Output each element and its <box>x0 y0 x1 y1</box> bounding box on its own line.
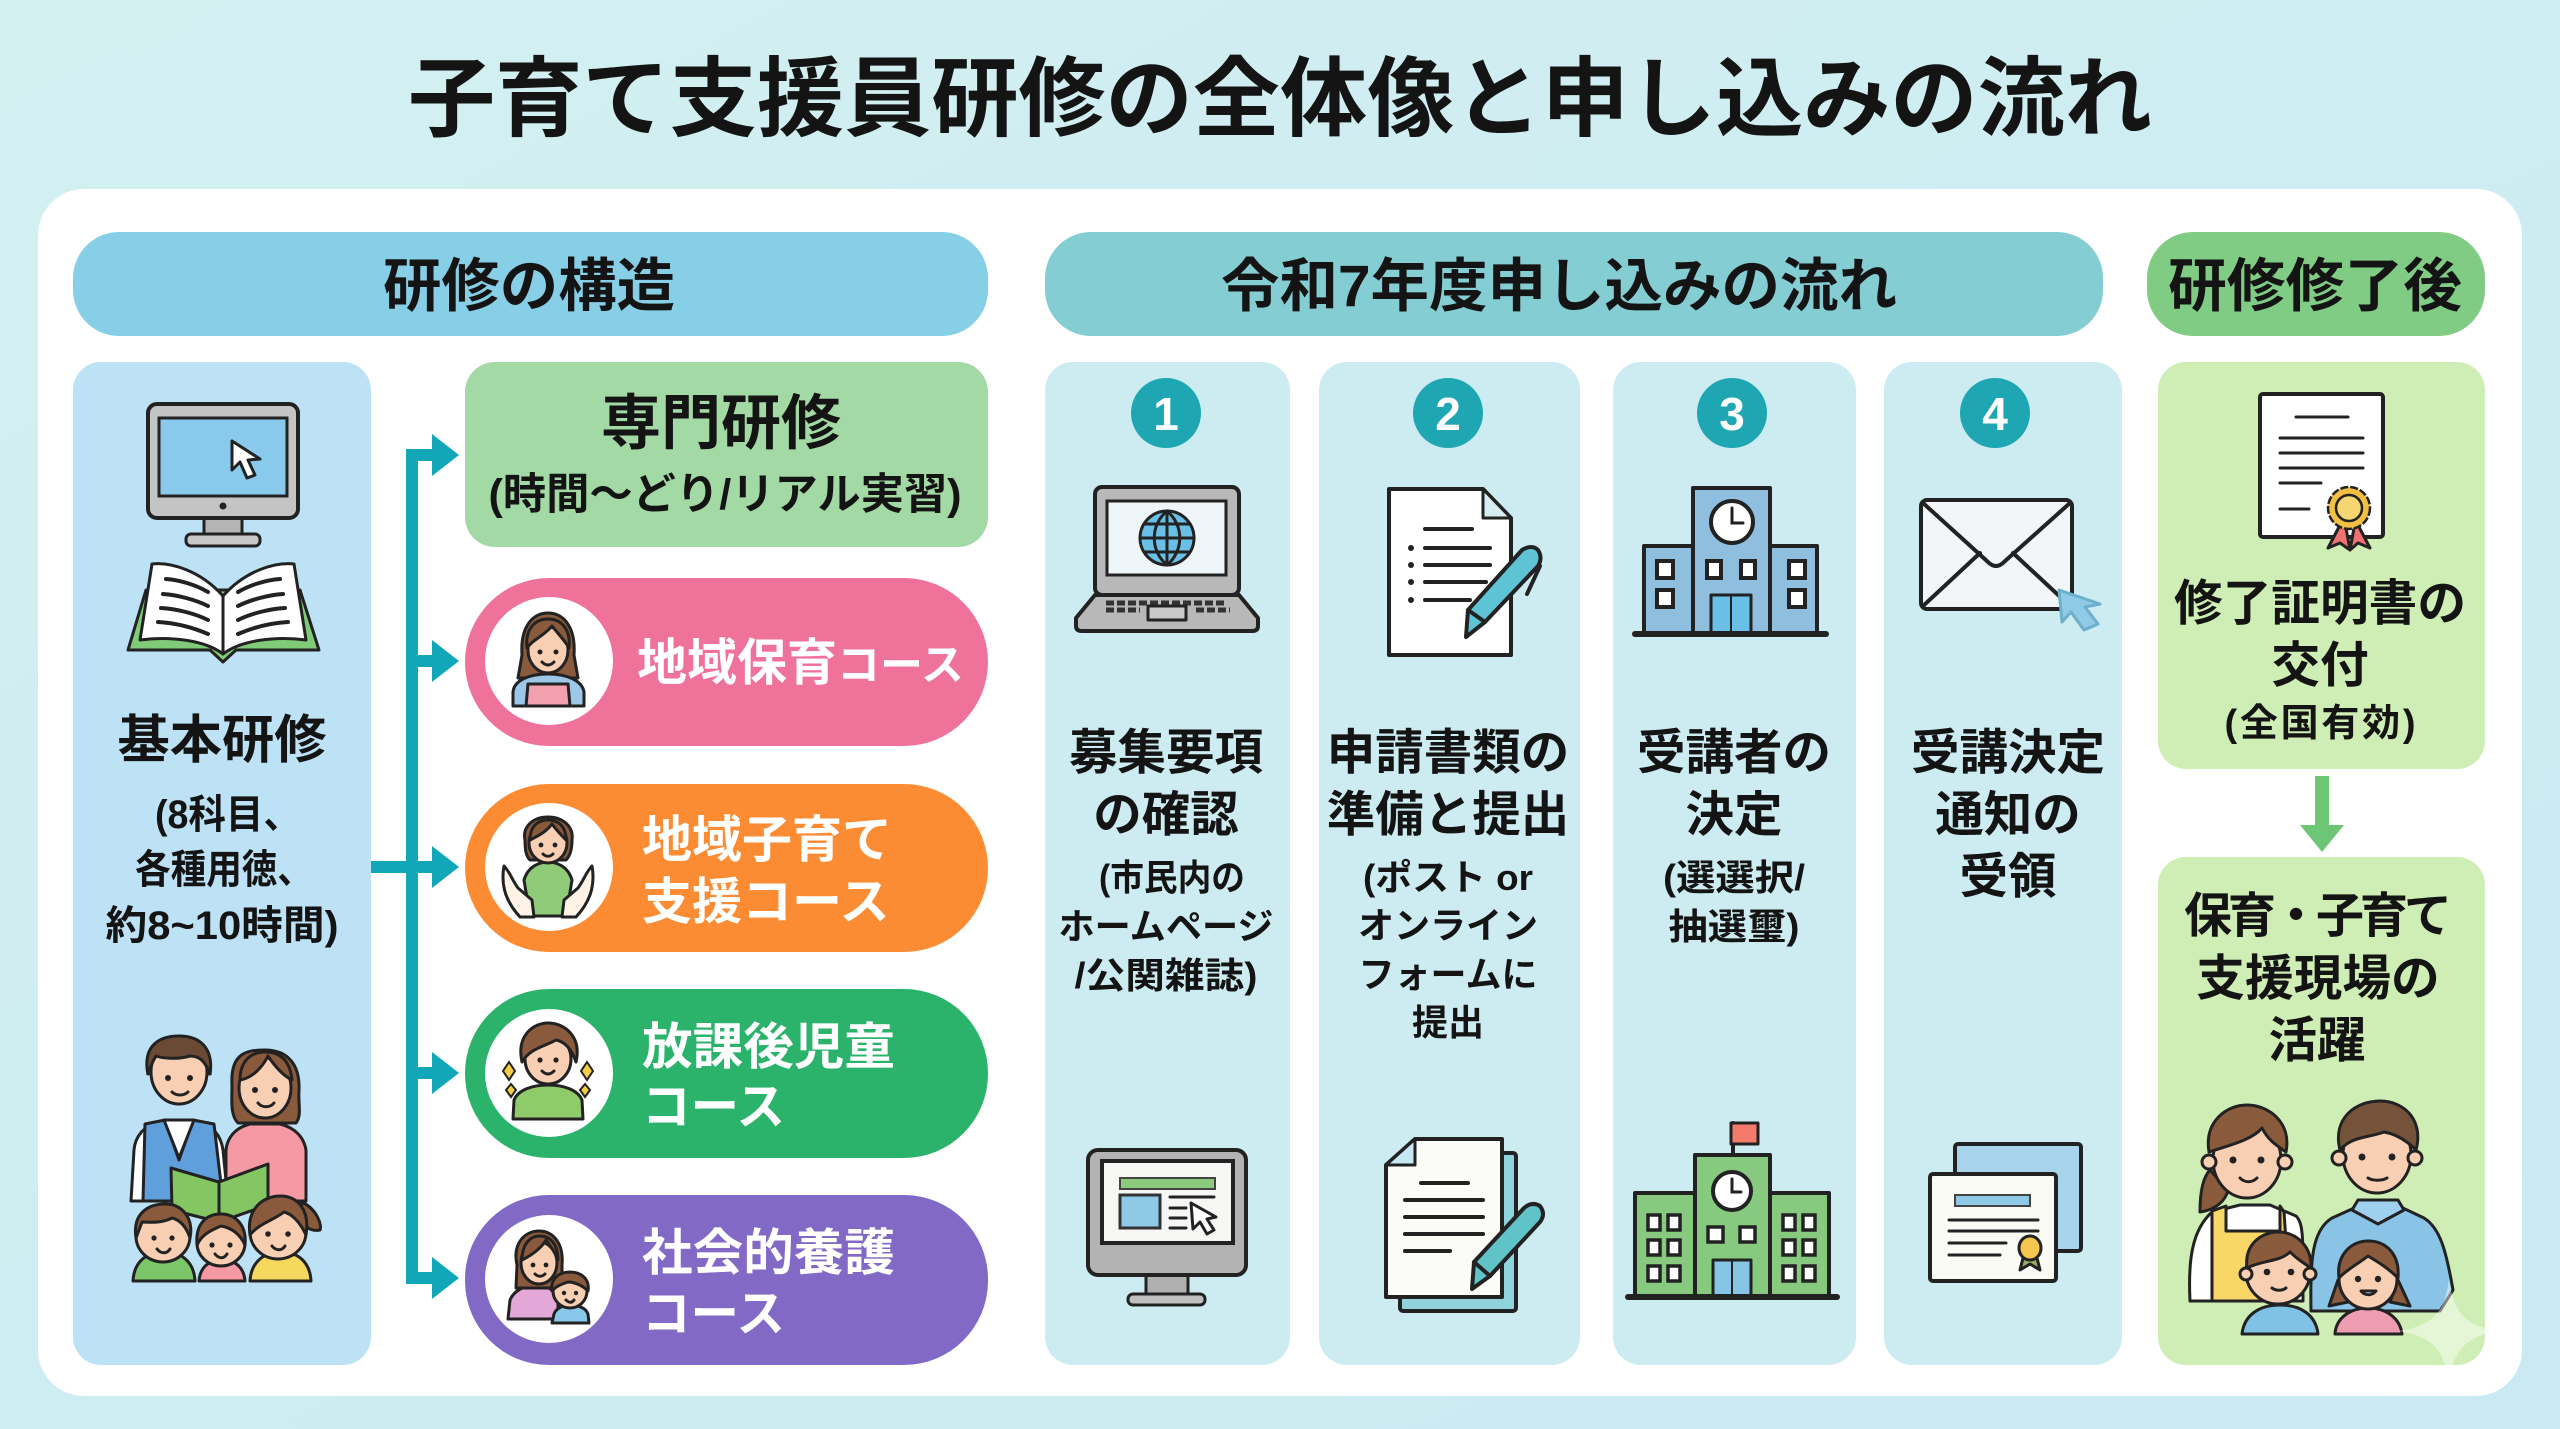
icon: blue school <box>1635 488 1826 634</box>
number badge 1: 1 <box>1153 388 1179 440</box>
icon: cheering worker <box>503 1023 593 1119</box>
icon: carer with cupped hands <box>503 817 593 917</box>
certificate text <box>2174 577 2466 745</box>
title: 子育て支援員研修の全体像と申し込みの流れ <box>408 51 2152 148</box>
label: 支援コース <box>642 874 890 930</box>
number badge 2: 2 <box>1435 388 1461 440</box>
icon: desktop monitor <box>148 404 298 546</box>
number badge 1 <box>1131 378 1201 448</box>
icon: certificate <box>2260 394 2383 550</box>
icon: envelope with cursor <box>1921 500 2100 630</box>
step 1 text <box>1058 726 1274 996</box>
section header: after training: 研修修了後 <box>2168 254 2462 319</box>
icon: carer with apron <box>513 613 584 706</box>
decorative sparkle <box>2398 1278 2500 1384</box>
text: basic training: 約8~10時間) <box>106 904 338 948</box>
step 3 text: 受講者の <box>1637 726 1831 780</box>
icon: parent and child <box>508 1231 589 1323</box>
step 3 text: 決定 <box>1685 788 1783 842</box>
illustration: family reading <box>131 1036 320 1281</box>
step 2 text: 提出 <box>1412 1002 1484 1043</box>
section header: application flow <box>1045 232 2103 336</box>
step 4 text <box>1911 726 2105 904</box>
step 4 text: 受領 <box>1959 850 2057 904</box>
step 2 text: オンライン <box>1358 905 1538 946</box>
panel: specialised training: 専門研修 <box>601 390 841 457</box>
text: basic training: (8科目、 <box>155 793 301 837</box>
course pill: community childcare <box>465 578 988 746</box>
panel: specialised training <box>465 362 988 547</box>
workplace text: 保育・子育て <box>2184 890 2452 943</box>
connector arrows <box>371 434 459 1299</box>
number badge 2 <box>1413 378 1483 448</box>
section header: application flow: 令和7年度申し込みの流れ <box>1221 254 1897 319</box>
panel: step 2 <box>1319 362 1580 1365</box>
number badge 3: 3 <box>1719 388 1745 440</box>
icon: notice with seal <box>1930 1144 2081 1281</box>
certificate text: (全国有効) <box>2224 703 2416 745</box>
icon: documents and pen <box>1386 1139 1543 1311</box>
panel: step 4 <box>1884 362 2122 1365</box>
panel: step 3 <box>1613 362 1856 1365</box>
step 4 text: 受講決定 <box>1911 726 2105 780</box>
step 3 text: 抽選璽) <box>1668 906 1800 947</box>
label: 地域子育て <box>642 812 892 868</box>
panel: certificate issued <box>2158 362 2485 769</box>
label: コース <box>642 1079 785 1135</box>
step 2 text: 申請書類の <box>1327 726 1569 780</box>
step 3 text <box>1637 726 1831 947</box>
text: basic training: 各種用徳、 <box>135 848 313 892</box>
certificate text: 修了証明書の <box>2174 577 2466 631</box>
label: 地域保育コース <box>637 635 964 691</box>
step 2 text: 準備と提出 <box>1327 788 1569 842</box>
label <box>642 1019 895 1135</box>
text: basic training <box>106 712 338 948</box>
text: basic training: 基本研修 <box>118 712 326 770</box>
section header: after training <box>2147 232 2485 336</box>
icon: laptop with globe <box>1076 487 1258 631</box>
label: コース <box>642 1286 785 1342</box>
step 2 text: (ポスト or <box>1363 857 1533 898</box>
course pill: community child-rearing support <box>465 784 988 952</box>
step 2 text: フォームに <box>1359 954 1537 995</box>
step 1 text: ホームページ <box>1058 906 1274 947</box>
section header: structure: 研修の構造 <box>383 254 675 319</box>
arrow: down to workplace <box>2300 776 2344 852</box>
workplace text: 支援現場の <box>2196 952 2440 1006</box>
label <box>642 812 892 930</box>
panel: active in childcare workplaces <box>2158 857 2485 1365</box>
step 3 text: (選選択/ <box>1663 857 1805 898</box>
label: 社会的養護 <box>642 1225 895 1281</box>
course pill: social care <box>465 1195 988 1365</box>
course pill: after-school children <box>465 989 988 1158</box>
number badge 4: 4 <box>1982 388 2008 440</box>
section header: structure <box>73 232 988 336</box>
step 1 text: /公関雑誌) <box>1074 955 1258 996</box>
step 2 text <box>1327 726 1569 1043</box>
icon: green school with flag <box>1628 1123 1837 1297</box>
step 1 text: の確認 <box>1093 788 1239 842</box>
icon: web page on monitor <box>1088 1150 1246 1305</box>
number badge 4 <box>1960 378 2030 448</box>
illustration: staff and children <box>2190 1101 2453 1334</box>
step 4 text: 通知の <box>1935 788 2081 842</box>
panel: step 1 <box>1045 362 1290 1365</box>
label <box>642 1225 895 1342</box>
workplace text: 活躍 <box>2268 1014 2366 1068</box>
workplace text <box>2184 890 2452 1068</box>
icon: document and pen <box>1389 489 1540 655</box>
step 1 text: (市民内の <box>1099 857 1245 898</box>
icon: open book <box>128 564 319 662</box>
certificate text: 交付 <box>2271 639 2369 693</box>
panel: specialised training: (時間〜どり/リアル実習) <box>488 471 962 519</box>
step 1 text: 募集要項 <box>1069 726 1263 780</box>
number badge 3 <box>1697 378 1767 448</box>
panel: basic training <box>73 362 371 1365</box>
label: 放課後児童 <box>642 1019 895 1075</box>
